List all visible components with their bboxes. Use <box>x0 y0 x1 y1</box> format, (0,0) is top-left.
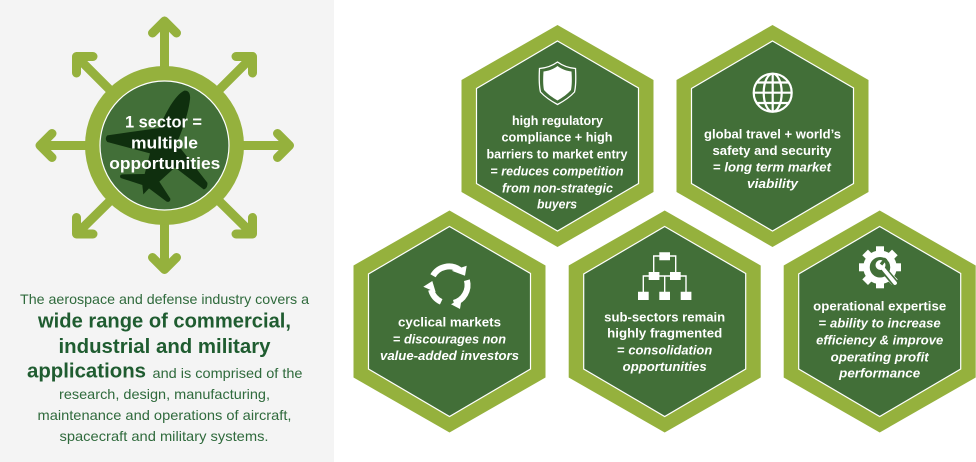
text: regulatory compliance: high regulatory <box>512 114 603 128</box>
inner circle <box>100 81 229 210</box>
text: fragmented sub-sectors: opportunities <box>623 360 707 374</box>
icon: globe <box>754 74 792 112</box>
center label: 1 sector = <box>125 112 202 132</box>
hexagon shape <box>784 210 976 432</box>
hexagon shape <box>569 210 761 432</box>
text: regulatory compliance: from non-strategic <box>502 182 613 196</box>
text: fragmented sub-sectors: highly fragmented <box>607 326 722 340</box>
center label: opportunities <box>109 154 220 173</box>
panel: hexagon fragmented sub-sectors <box>569 210 761 432</box>
text: fragmented sub-sectors <box>604 310 725 374</box>
text: regulatory compliance: compliance + high <box>502 130 612 144</box>
text: regulatory compliance <box>486 114 628 212</box>
icon: cycle arrows <box>423 266 468 309</box>
text block: industry description: applications <box>27 360 146 382</box>
text block: industry description: wide range of commercial, <box>37 310 291 332</box>
text: operational expertise: = ability to increase <box>819 316 941 330</box>
text: global travel: global travel + world’s <box>704 128 841 142</box>
center label <box>109 112 220 173</box>
text: operational expertise: operational expertise <box>813 300 946 314</box>
arrows radiating outward <box>40 21 290 270</box>
text block: industry description: industrial and military <box>58 335 271 358</box>
hexagon shape <box>462 25 654 247</box>
center label: multiple <box>131 134 198 152</box>
text: global travel: = long term market <box>713 160 832 174</box>
text: cyclical markets: = discourages non <box>393 332 506 346</box>
text: global travel <box>704 128 841 191</box>
text block: industry description: spacecraft and military systems. <box>60 428 268 444</box>
hexagon shape <box>676 25 868 247</box>
panel: hexagon global travel <box>676 25 868 247</box>
text: global travel: safety and security <box>712 144 832 158</box>
text: operational expertise: efficiency & improve <box>816 333 943 347</box>
text: cyclical markets: cyclical markets <box>398 316 501 330</box>
text: fragmented sub-sectors: = consolidation <box>617 344 713 358</box>
text: cyclical markets <box>380 316 519 363</box>
text: global travel: viability <box>747 177 799 191</box>
text: cyclical markets: value-added investors <box>380 349 519 363</box>
text: fragmented sub-sectors: sub-sectors remain <box>604 310 725 324</box>
panel: left background <box>0 0 334 462</box>
text block: industry description: research, design, manufacturing, <box>59 386 270 402</box>
hexagon shape <box>354 210 546 432</box>
outer ring <box>85 66 244 225</box>
text: regulatory compliance: = reduces competition <box>490 164 624 178</box>
diagram: one sector with eight arrows <box>40 21 290 270</box>
text block: industry description <box>20 291 309 444</box>
panel: hexagon operational expertise <box>784 210 976 432</box>
icon: airplane silhouette <box>106 91 207 202</box>
panel: hexagon regulatory compliance <box>462 25 654 247</box>
text block: industry description: and is comprised of the <box>152 365 303 381</box>
text block: industry description: maintenance and operations of aircraft, <box>38 407 292 423</box>
text: operational expertise <box>813 300 946 380</box>
text: operational expertise: operating profit <box>831 350 930 364</box>
text: operational expertise: performance <box>838 366 920 380</box>
panel: hexagon cyclical markets <box>354 210 546 432</box>
icon: shield <box>539 62 576 104</box>
icon: organization chart <box>638 252 691 300</box>
text block: industry description: The aerospace and defense industry covers a <box>20 291 309 307</box>
text: regulatory compliance: buyers <box>537 198 577 212</box>
text: regulatory compliance: barriers to market entry <box>486 148 628 162</box>
icon: gear and wrench <box>859 246 901 288</box>
